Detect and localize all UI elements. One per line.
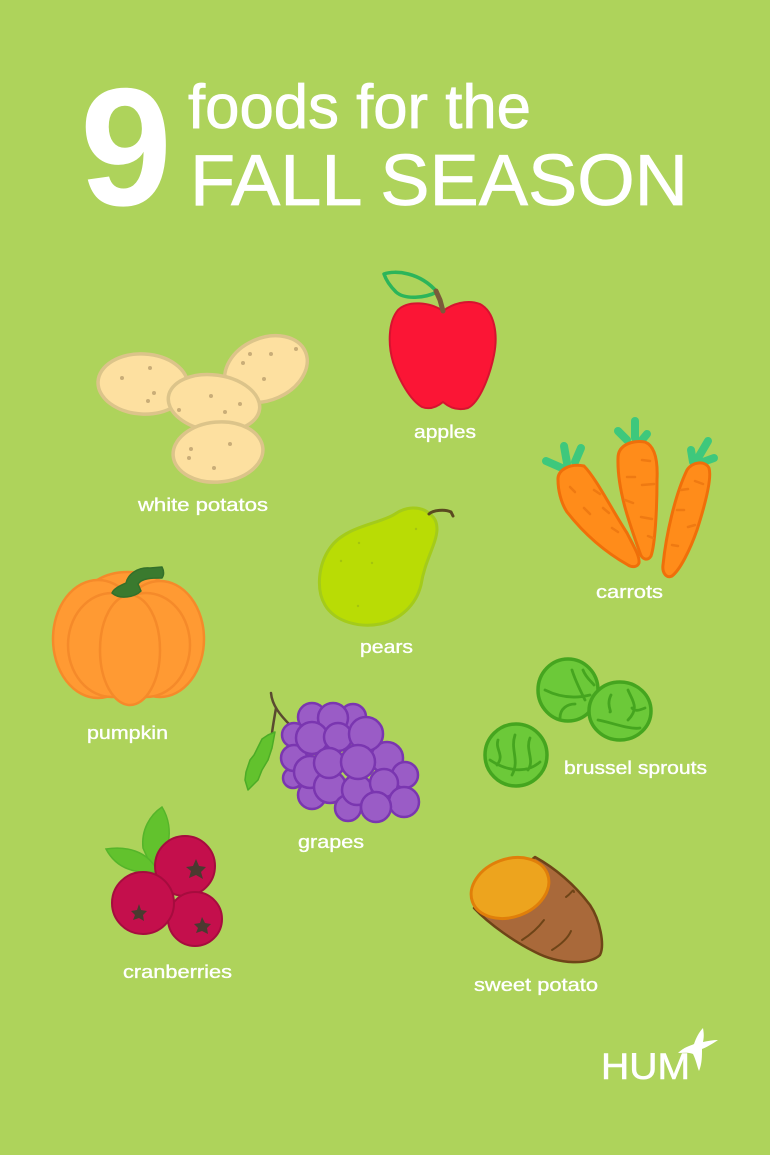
big number 9: 9: [80, 53, 172, 241]
label: apples: [414, 422, 476, 442]
logo: HUM: [601, 1028, 718, 1087]
icon: sweet potato: [462, 847, 602, 962]
icon: carrots: [546, 421, 714, 577]
label: sweet potato: [474, 975, 598, 995]
icon: brussel sprouts: [485, 659, 651, 786]
food: white potatoes: [96, 323, 318, 515]
label: pumpkin: [87, 723, 168, 743]
label: brussel sprouts: [564, 758, 707, 778]
label: pears: [360, 637, 413, 657]
icon: pumpkin: [53, 567, 204, 705]
icon: grapes: [245, 693, 419, 822]
icon: apple: [384, 272, 496, 409]
food: grapes: [245, 693, 419, 852]
title line one: foods for the: [188, 73, 531, 142]
food: brussel sprouts: [485, 659, 707, 786]
food: carrots: [546, 421, 714, 602]
label: carrots: [596, 582, 663, 602]
food: cranberries: [106, 807, 232, 982]
food: sweet potato: [462, 847, 602, 995]
logo wordmark: HUM: [601, 1046, 690, 1087]
icon: hummingbird: [678, 1028, 718, 1071]
icon: pear: [319, 508, 453, 625]
label: cranberries: [123, 962, 232, 982]
title: [80, 53, 688, 241]
title line two: FALL SEASON: [190, 141, 688, 221]
icon: cranberries: [106, 807, 222, 946]
label: grapes: [298, 832, 364, 852]
food: pumpkin: [53, 567, 204, 743]
icon: potatoes: [96, 323, 318, 486]
food: apples: [384, 272, 496, 442]
food: pears: [319, 508, 453, 657]
label: white potatos: [137, 495, 268, 515]
